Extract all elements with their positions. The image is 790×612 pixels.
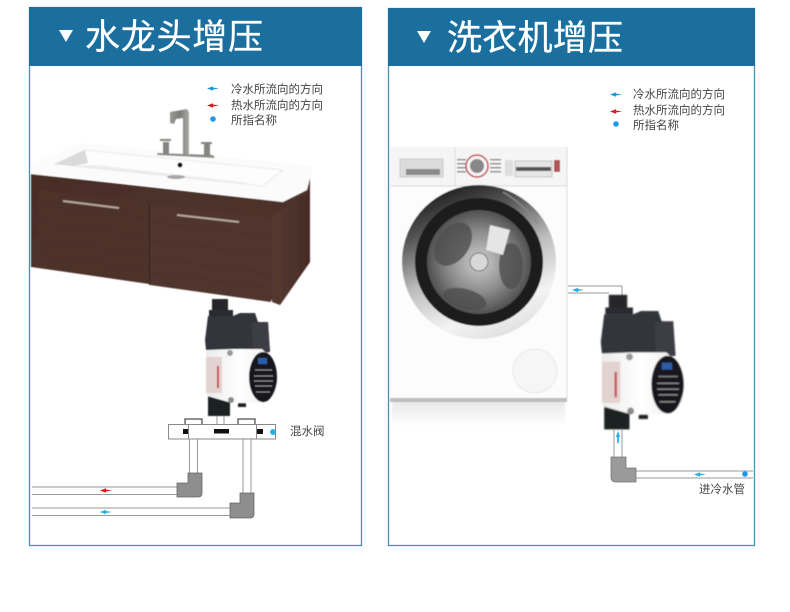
label: cold water inlet: 进冷水管 [699,482,745,496]
sink cabinet illustration [31,109,313,305]
washing machine [390,147,567,426]
inlet pipe [611,430,753,482]
panel frame [388,8,754,546]
control panel [400,155,560,177]
lower washer detail [513,349,557,393]
washer base [390,398,567,402]
pump: faucet side [205,299,277,416]
legend: 所指名称 [633,118,679,132]
label: mixing valve: 混水阀 [290,424,324,438]
hot water pipe [32,439,202,497]
washer body [390,147,567,398]
door [402,185,556,339]
legend: 冷水所流向的方向 [231,82,323,96]
cabinet [31,174,310,305]
panel: washing machine boost [388,8,755,546]
legend: 热水所流向的方向 [633,103,725,117]
heading bar: 洗衣机增压 [447,19,623,58]
heading bar: 水龙头增压 [85,18,263,57]
faucet [157,109,215,158]
heading bar [388,8,755,66]
legend [207,82,323,127]
mixer valve [168,416,276,439]
panel: faucet boost [29,7,362,546]
basin top [31,143,313,202]
legend: 所指名称 [231,113,277,127]
cold water pipe [32,439,254,518]
legend: 热水所流向的方向 [231,98,323,112]
legend [610,87,725,132]
outlet pipe [568,286,622,296]
pump: washer side [601,295,684,429]
heading bar [29,7,362,66]
legend: 冷水所流向的方向 [633,87,725,101]
panel frame [30,8,362,546]
